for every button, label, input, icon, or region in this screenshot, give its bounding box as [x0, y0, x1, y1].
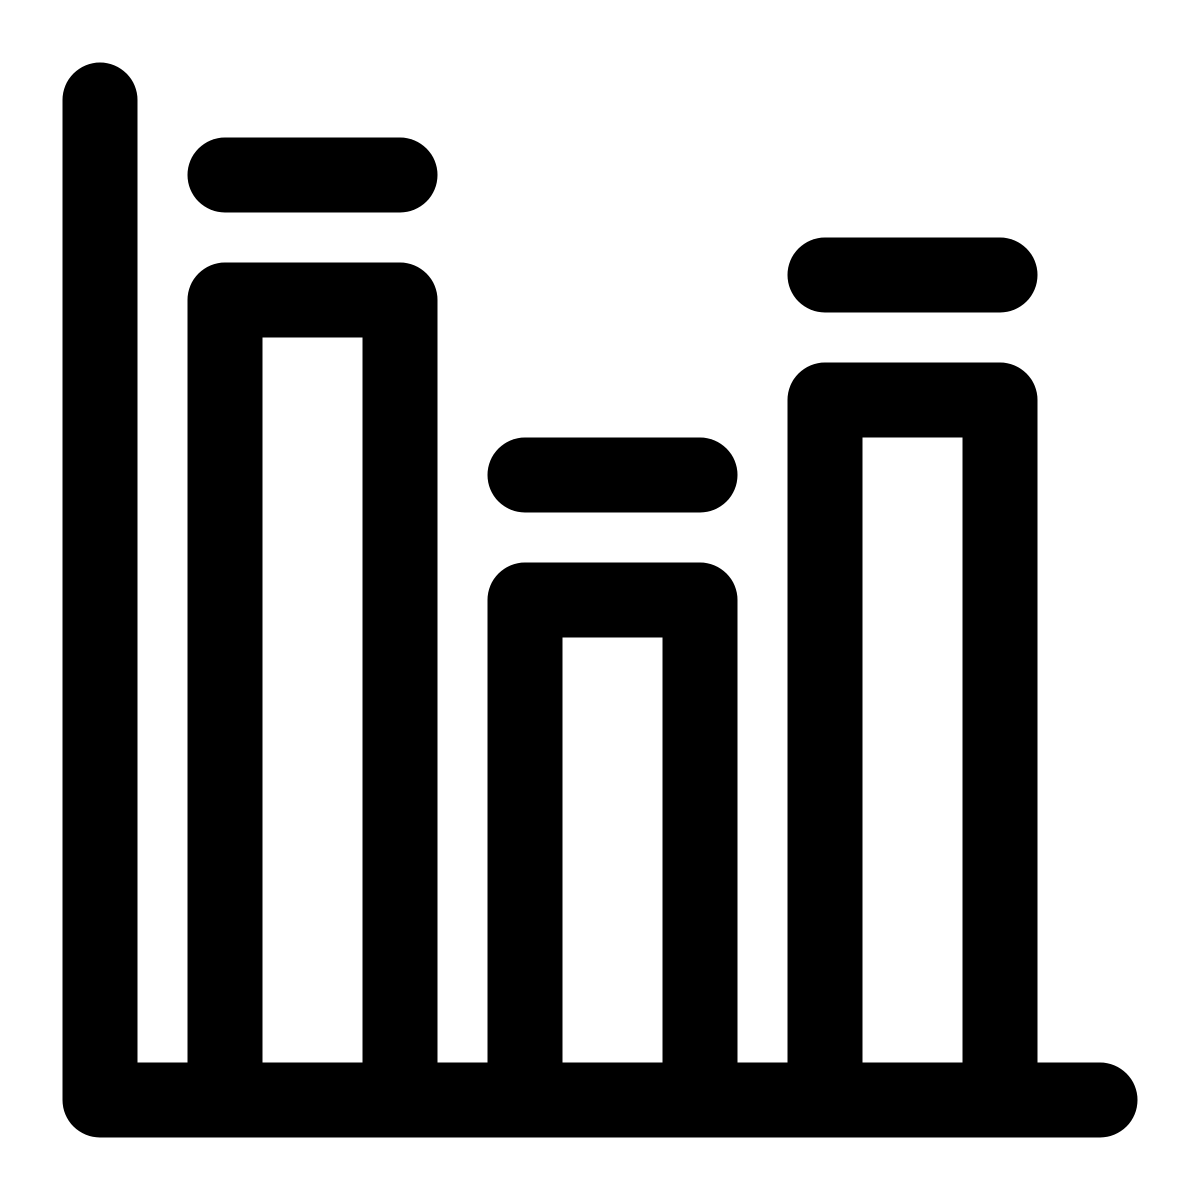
bar 2	[525, 600, 700, 1100]
axes	[100, 100, 1100, 1100]
bar 1 cap	[225, 138, 400, 212]
bar 1	[225, 300, 400, 1100]
bar 3	[825, 400, 1000, 1100]
bar 2 cap	[525, 438, 700, 512]
bar 3 cap	[825, 238, 1000, 312]
